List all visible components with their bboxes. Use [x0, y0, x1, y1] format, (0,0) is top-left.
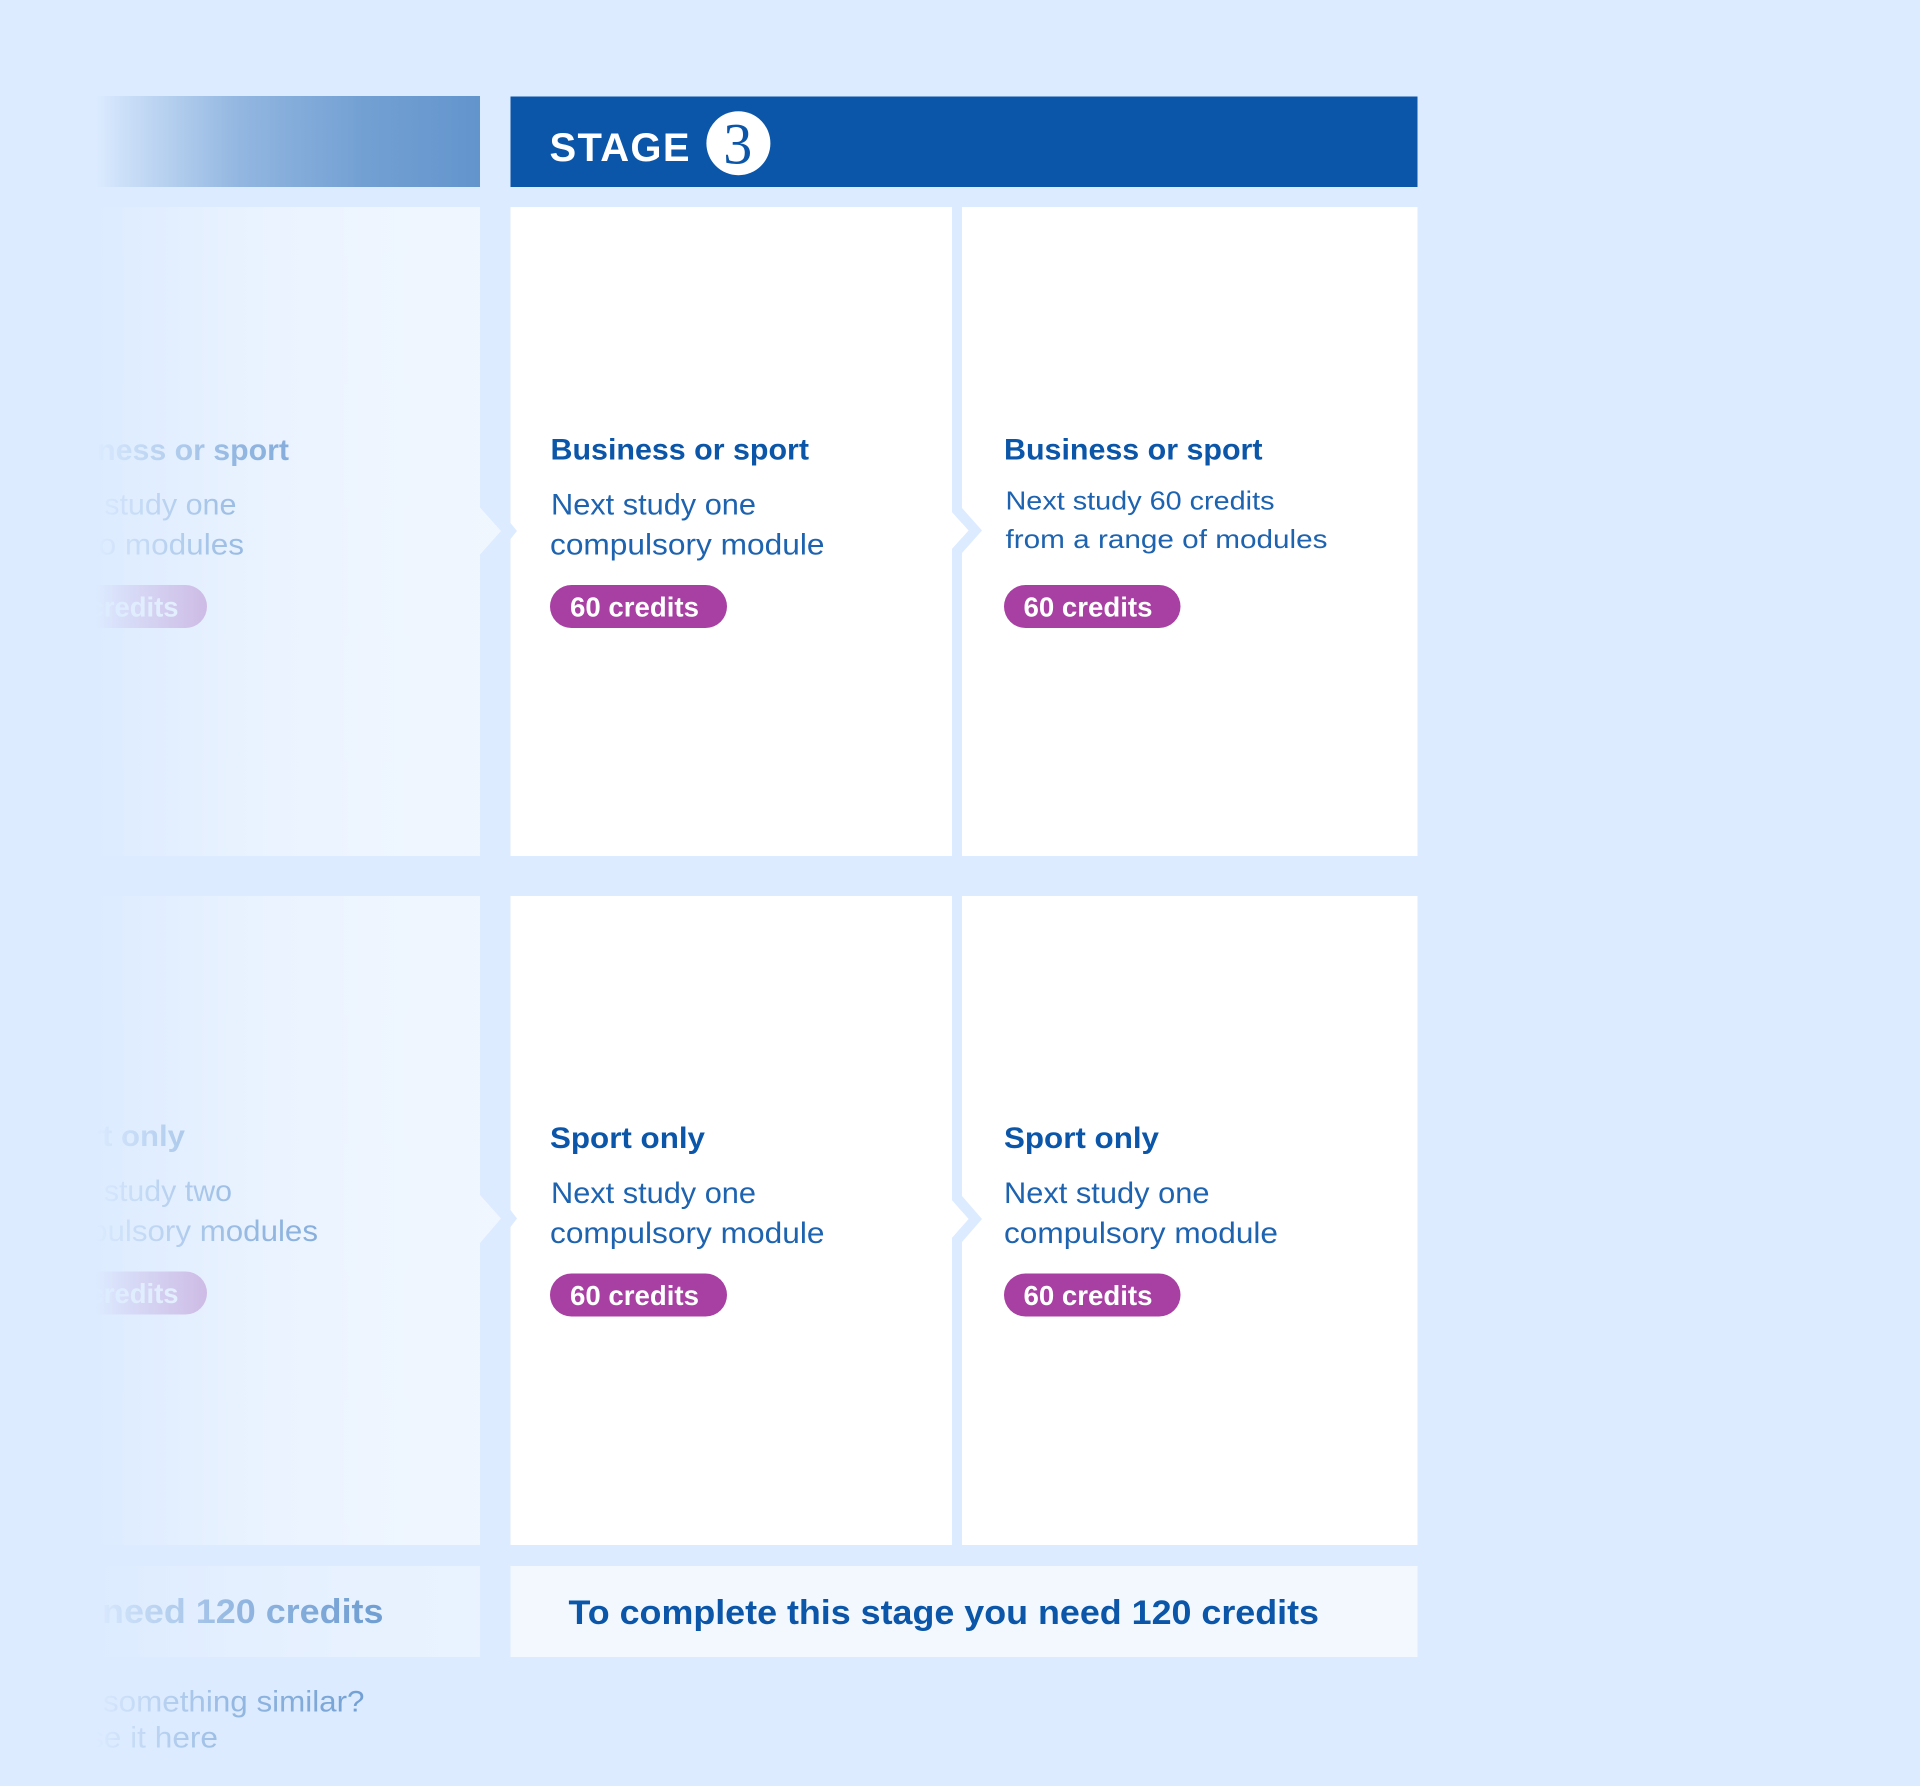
- credits pill: [550, 1274, 727, 1316]
- panel: business or sport, range of modules: Next study 60 credits: [1006, 486, 1274, 516]
- stage 2 link text: something similar?: [103, 1686, 364, 1719]
- panel: sport only, second module: [962, 896, 1418, 1545]
- panel: business or sport, compulsory module: compulsory module: [550, 528, 824, 562]
- arrow: row 2 progression: [952, 1196, 982, 1242]
- stage number badge: [706, 111, 770, 176]
- panel: sport only, second module: Sport only: [1004, 1122, 1159, 1155]
- arrow: row 1 progression: [952, 508, 982, 553]
- panel: stage 2 sport only: [0, 896, 501, 1545]
- stage 2 link text: se it here: [88, 1722, 218, 1754]
- stage 3 credits total: [510, 1566, 1418, 1657]
- panel: business or sport, compulsory module: Next study one: [551, 488, 756, 521]
- panel: business or sport, compulsory module: [510, 207, 952, 856]
- credits pill: 60 credits: [570, 592, 699, 622]
- stage number badge: 3: [723, 111, 752, 176]
- panel: business or sport, range of modules: Business or sport: [1004, 434, 1263, 467]
- panel: stage 2 sport only: compulsory modules: [31, 1215, 318, 1248]
- credits pill: 60 credits: [1024, 592, 1152, 622]
- panel: sport only, second module: compulsory module: [1004, 1217, 1278, 1250]
- panel: stage 2 business or sport: Business or sport: [32, 434, 289, 467]
- panel: sport only, first module: Sport only: [550, 1122, 705, 1155]
- stage 3 credits total: To complete this stage you need 120 credits: [568, 1594, 1319, 1632]
- stage 3 header: [510, 96, 1418, 187]
- panel: stage 2 sport only: 60 credits: [50, 1278, 178, 1309]
- panel: stage 2 sport only: Next study two: [33, 1175, 232, 1208]
- stage label: STAGE: [550, 126, 690, 170]
- stage 2 credits total: [0, 1566, 480, 1657]
- panel: sport only, second module: Next study one: [1004, 1177, 1210, 1210]
- panel: sport only, first module: Next study one: [551, 1177, 756, 1210]
- credits pill: [550, 585, 727, 628]
- panel: sport only, first module: compulsory module: [550, 1217, 824, 1250]
- panel: business or sport, range of modules: from a range of modules: [1006, 524, 1328, 554]
- panel: sport only, first module: [510, 896, 952, 1545]
- panel: business or sport, compulsory module: Business or sport: [550, 434, 809, 467]
- credits pill: [1004, 585, 1180, 628]
- credits pill: 60 credits: [570, 1280, 699, 1311]
- panel: stage 2 sport only: Sport only: [31, 1120, 185, 1153]
- faded stage 2 column: [0, 96, 501, 1754]
- stage 2 header bar: [0, 96, 480, 187]
- stage 2 link text: [88, 1686, 364, 1754]
- panel: stage 2 business or sport: of two modules: [32, 528, 244, 562]
- panel: stage 2 business or sport: [0, 207, 501, 856]
- credits pill: 60 credits: [1024, 1280, 1152, 1311]
- stage 2 credits total: need 120 credits: [102, 1593, 384, 1631]
- credits pill: [1004, 1274, 1180, 1316]
- panel: business or sport, range of modules: [962, 207, 1418, 856]
- panel: stage 2 business or sport: 60 credits: [50, 592, 178, 622]
- panel: stage 2 business or sport: Next study one: [33, 488, 236, 521]
